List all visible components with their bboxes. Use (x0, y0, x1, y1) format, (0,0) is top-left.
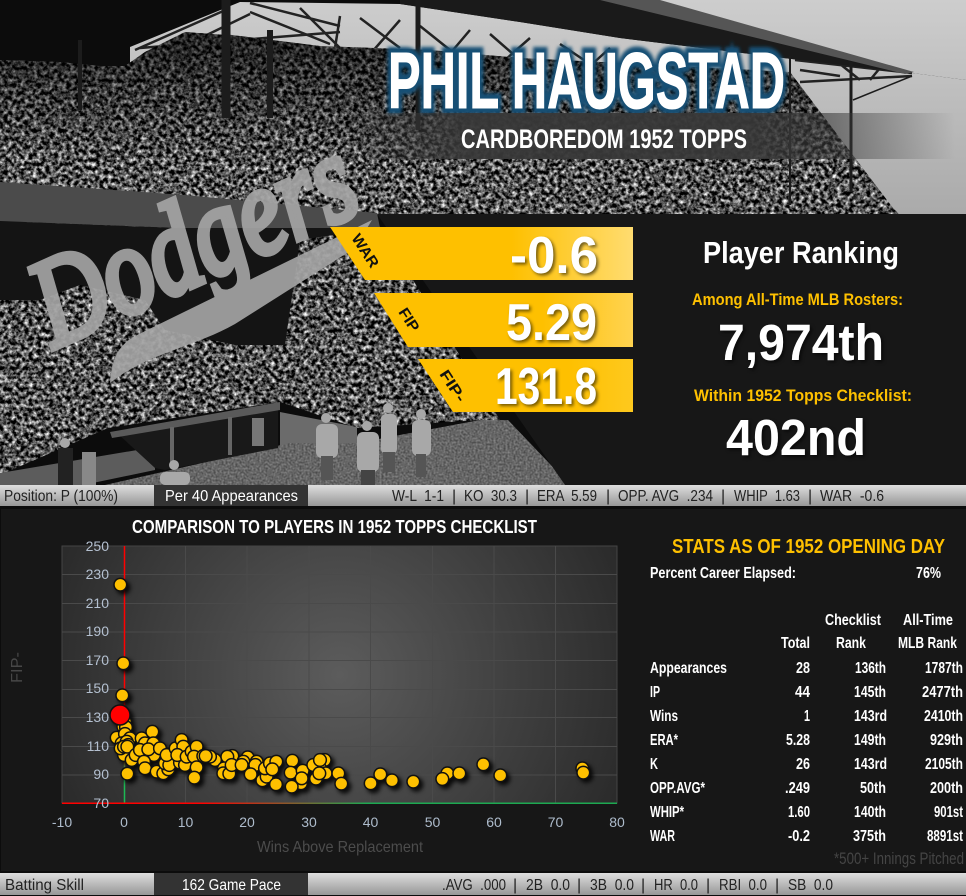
pitching rate stats: KO 30.3 (464, 488, 517, 505)
photo players (58, 403, 431, 485)
row: wins: Wins (650, 708, 678, 725)
photo shadow under balcony (0, 221, 380, 345)
tab text: 162 Game Pace (182, 877, 281, 894)
table headers (781, 612, 957, 652)
pitching rate stats: ERA 5.59 (537, 488, 597, 505)
photo sky above roof (616, 0, 966, 80)
row: WAR: 375th (853, 828, 886, 845)
player ranking text (692, 235, 912, 466)
FIP- value: 131.8 (495, 358, 597, 416)
batting stats: .AVG .000 (442, 877, 506, 894)
x axis tick labels (52, 814, 625, 830)
all-time label: Among All-Time MLB Rosters: (692, 291, 903, 309)
subtitle band (345, 113, 955, 159)
pitching rate stats: | (808, 488, 812, 505)
photo: ballpark grandstand (0, 0, 966, 487)
pitching rate stats (392, 488, 884, 505)
row: appearances (650, 660, 963, 677)
batting stats: 2B 0.0 (526, 877, 570, 894)
row: opp avg (650, 780, 963, 797)
row: WHIP: 1.60 (788, 804, 810, 821)
row: IP (650, 684, 963, 701)
x axis tick labels: 30 (301, 814, 317, 830)
photo pillars (80, 0, 912, 205)
checklist rank: 402nd (726, 409, 866, 466)
row: ERA (650, 732, 963, 749)
logo: Dodgers script: Dodgers (8, 109, 376, 374)
y axis tick labels (86, 538, 109, 811)
panel: lower background (1, 509, 966, 871)
stat bar: FIP (374, 293, 633, 352)
scatter chart (9, 538, 625, 856)
logo: Dodgers script (8, 109, 376, 383)
chart title: COMPARISON TO PLAYERS IN 1952 TOPPS CHECKLIST (132, 517, 537, 537)
FIP label: FIP (395, 305, 423, 335)
row: appearances: 28 (796, 660, 810, 677)
y axis tick labels: 210 (86, 595, 109, 611)
row: WHIP: 140th (854, 804, 886, 821)
stat bar: WAR (330, 227, 633, 285)
y axis tick labels: 230 (86, 566, 109, 582)
x axis tick labels: 20 (239, 814, 255, 830)
y axis tick labels: 150 (86, 680, 109, 696)
batting stats: RBI 0.0 (719, 877, 767, 894)
y axis tick labels: 130 (86, 709, 109, 725)
pitching rate stats: WHIP 1.63 (734, 488, 800, 505)
panel: player ranking background (377, 214, 966, 485)
checklist label: Within 1952 Topps Checklist: (694, 387, 912, 405)
row: ERA: 5.28 (786, 732, 810, 749)
position: Position: P (100%) (4, 488, 118, 505)
pitching rate stats: | (721, 488, 725, 505)
row: WAR: -0.2 (788, 828, 810, 845)
batting skill label: Batting Skill (5, 877, 84, 894)
y axis tick labels: 190 (86, 623, 109, 639)
batting stats: | (641, 877, 645, 894)
FIP- label: FIP- (436, 367, 469, 406)
x axis tick labels: 10 (178, 814, 193, 830)
y axis tick labels: 250 (86, 538, 109, 554)
tab text: Per 40 Appearances (165, 488, 298, 505)
all-time rank: 7,974th (718, 314, 884, 371)
y axis tick labels: 70 (93, 795, 109, 811)
photo balcony facade (0, 182, 380, 228)
y axis tick labels: 90 (93, 766, 109, 782)
x axis tick labels: 0 (120, 814, 128, 830)
y axis title: FIP- (9, 652, 26, 683)
tab: 162 game pace (154, 873, 308, 895)
status bar: batting (0, 873, 966, 895)
pitching rate stats: W-L 1-1 (392, 488, 444, 505)
logo swoosh (110, 220, 372, 383)
photo dugout wall left (0, 447, 155, 485)
row: IP: 44 (795, 684, 810, 701)
status bar: pitching (0, 485, 966, 506)
photo roof fascia (600, 0, 914, 74)
WAR label: WAR (348, 231, 382, 271)
y axis tick labels: 110 (87, 738, 109, 754)
row: ERA: 149th (854, 732, 886, 749)
row: appearances: 136th (855, 660, 886, 677)
row: ERA: ERA* (650, 732, 679, 749)
table headers: Total (781, 635, 810, 652)
table headers: Rank (836, 635, 866, 652)
axis lines (124, 546, 126, 803)
WAR value: -0.6 (510, 227, 598, 285)
row: WHIP: WHIP* (650, 804, 685, 821)
row: WHIP (650, 804, 963, 821)
stat bar: FIP- (418, 358, 633, 416)
batting stats: | (706, 877, 710, 894)
photo roof right (400, 0, 912, 73)
y axis tick labels: 170 (86, 652, 109, 668)
batting stats: HR 0.0 (654, 877, 698, 894)
batting stats: | (513, 877, 517, 894)
percent career elapsed: Percent Career Elapsed: (650, 565, 796, 582)
row: IP: 145th (854, 684, 886, 701)
row: K: 26 (796, 756, 810, 773)
row: opp avg: 50th (860, 780, 886, 797)
x axis tick labels: -10 (52, 814, 72, 830)
batting stats: SB 0.0 (788, 877, 833, 894)
stats table (650, 536, 964, 868)
x axis tick labels: 50 (425, 814, 440, 830)
x axis tick labels: 70 (548, 814, 563, 830)
row: opp avg: .249 (785, 780, 810, 797)
pitching rate stats: WAR -0.6 (820, 488, 884, 505)
photo upper crowd shading (0, 32, 844, 158)
row: K: K (650, 756, 658, 773)
table headers: Checklist (825, 612, 882, 629)
row: wins (650, 708, 963, 725)
batting stats: | (577, 877, 581, 894)
pitching rate stats: | (452, 488, 456, 505)
photo upper crowd (0, 20, 900, 216)
pitching rate stats: OPP. AVG .234 (618, 488, 713, 505)
row: wins: 143rd (854, 708, 887, 725)
row: K (650, 756, 963, 773)
row: opp avg: OPP.AVG* (650, 780, 706, 797)
pitching rate stats: | (525, 488, 529, 505)
x axis tick labels: 80 (609, 814, 625, 830)
data point: Phil Haugstad (110, 705, 130, 725)
ranking heading: Player Ranking (703, 235, 899, 270)
x axis title: Wins Above Replacement (257, 839, 424, 856)
x axis tick labels: 40 (363, 814, 378, 830)
batting stats: | (775, 877, 779, 894)
pitching rate stats: | (606, 488, 610, 505)
row: IP: IP (650, 684, 660, 701)
photo lower crowd (0, 222, 510, 472)
photo field (105, 420, 565, 485)
title (388, 36, 785, 125)
data points: checklist players (110, 578, 590, 793)
x axis tick labels: 60 (486, 814, 502, 830)
table headers: All-Time (903, 612, 953, 629)
row: wins: 1 (804, 708, 810, 725)
photo steel truss (135, 3, 912, 82)
row: appearances: Appearances (650, 660, 727, 677)
plot area (62, 546, 617, 803)
row: K: 143rd (854, 756, 887, 773)
photo sky through truss (130, 2, 966, 222)
row: WAR (650, 828, 963, 845)
batting stats: 3B 0.0 (590, 877, 634, 894)
row: WAR: WAR (650, 828, 675, 845)
FIP value: 5.29 (506, 294, 597, 352)
subtitle: CARDBOREDOM 1952 TOPPS (461, 124, 747, 154)
tab: per 40 appearances (154, 485, 308, 506)
stats table: 76% (916, 565, 941, 582)
batting stats (442, 877, 833, 894)
photo dugout (110, 402, 357, 470)
